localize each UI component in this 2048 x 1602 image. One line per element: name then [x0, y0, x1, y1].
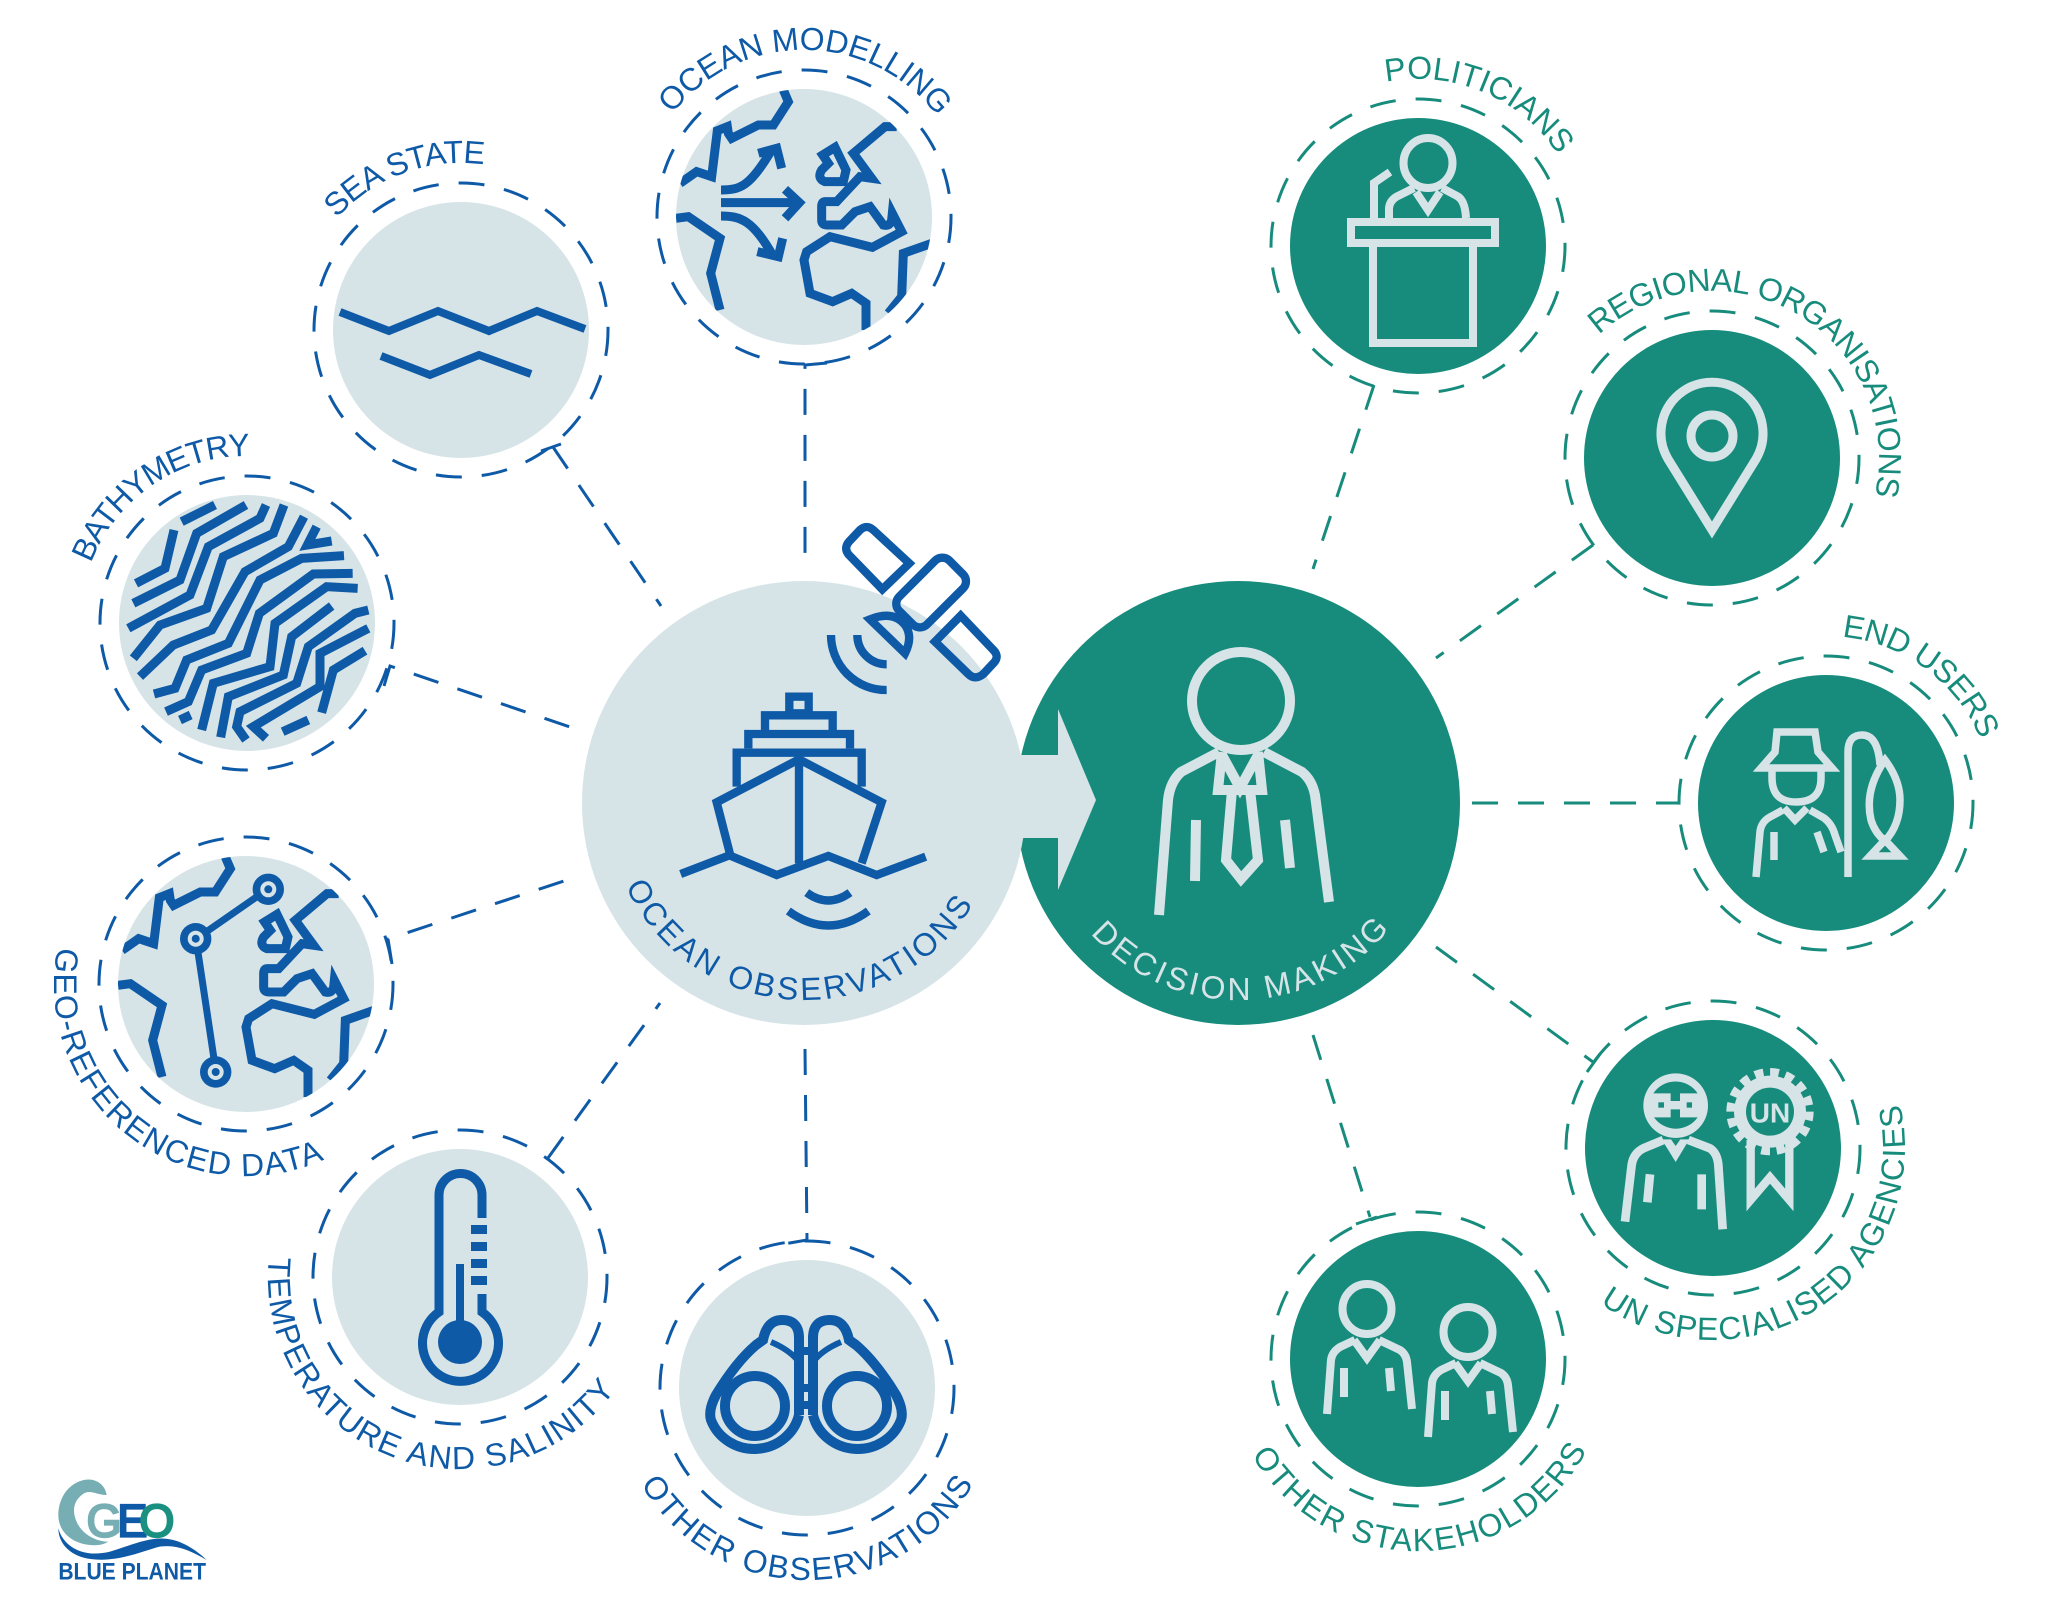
connector: ocean modelling — [805, 363, 827, 558]
label: other stakeholders: OTHER STAKEHOLDERS — [1256, 1443, 1584, 1552]
icon: world map with nodes — [118, 857, 374, 1097]
icon: UN official with rosette: UN — [1750, 1097, 1790, 1128]
icon: fisher with fish — [1756, 732, 1900, 877]
label: temperature and salinity: TEMPERATURE AND SALINITY — [268, 1258, 610, 1470]
label: end users: END USERS — [1844, 615, 1998, 736]
panel: regional organisations — [1564, 268, 1902, 606]
label: decision making: DECISION MAKING — [1092, 919, 1386, 1000]
panel: ocean observations hub — [582, 581, 1026, 1025]
panel: politicians — [1270, 56, 1573, 394]
icon: satellite — [831, 527, 997, 690]
icon: UN official with rosette — [1625, 1073, 1809, 1229]
panel: other observations — [644, 1240, 970, 1580]
panel: ocean modelling — [656, 28, 952, 366]
icon: world map with current arrows — [676, 90, 932, 330]
panel: other stakeholders — [1256, 1210, 1584, 1552]
logo: GEO Blue Planet — [58, 1480, 207, 1585]
panel: geo-referenced data — [54, 836, 394, 1176]
logo: GEO Blue Planet: G — [87, 1496, 122, 1547]
icon: first stakeholder — [1327, 1284, 1412, 1414]
label: regional organisations: REGIONAL ORGANISATIONS — [1587, 268, 1902, 497]
label: UN specialised agencies: UN SPECIALISED AGENCIES — [1604, 1106, 1906, 1340]
label: ocean modelling: OCEAN MODELLING — [660, 28, 950, 112]
label: ocean observations: OCEAN OBSERVATIONS — [629, 880, 970, 1000]
connector: regional organisations — [1436, 545, 1593, 658]
connector: bathymetry — [384, 666, 570, 727]
arrow: observations to decision making — [1000, 709, 1096, 890]
icon: binoculars — [710, 1320, 902, 1449]
icon: ship — [681, 697, 926, 925]
label: other observations: OTHER OBSERVATIONS — [644, 1476, 970, 1580]
connector: UN specialised agencies — [1436, 947, 1600, 1072]
connector: temperature and salinity — [548, 1003, 660, 1158]
logo: GEO Blue Planet: BLUE PLANET — [58, 1558, 206, 1585]
logo: GEO Blue Planet: O — [139, 1496, 174, 1547]
icon: connected data nodes — [180, 874, 284, 1088]
connector: end users — [1472, 802, 1680, 804]
panel: sea state — [312, 140, 610, 478]
icon: depth contour lines — [128, 505, 368, 740]
connector: other stakeholders — [1313, 1035, 1377, 1224]
icon: waves — [340, 311, 585, 375]
panel: UN specialised agencies — [1564, 1000, 1906, 1340]
connector: geo-referenced data — [388, 879, 570, 964]
connector: other observations — [784, 1049, 807, 1244]
label: geo-referenced data: GEO-REFERENCED DATA — [54, 950, 324, 1176]
connector: politicians — [1313, 385, 1374, 569]
logo: GEO Blue Planet: E — [117, 1496, 147, 1547]
panel: temperature and salinity — [268, 1128, 610, 1470]
icon: decision maker person — [1159, 652, 1329, 915]
panel: decision making hub — [1016, 581, 1460, 1025]
icon: second stakeholder — [1428, 1307, 1513, 1437]
label: politicians: POLITICIANS — [1386, 56, 1573, 152]
panel: bathymetry — [72, 434, 396, 772]
icon: location pin — [1661, 382, 1763, 530]
connector: sea state — [541, 444, 661, 606]
label: sea state: SEA STATE — [325, 140, 484, 214]
panel: end users — [1678, 615, 1998, 952]
icon: thermometer — [423, 1174, 499, 1381]
label: bathymetry: BATHYMETRY — [72, 434, 248, 561]
icon: speaker at lectern — [1351, 138, 1495, 343]
